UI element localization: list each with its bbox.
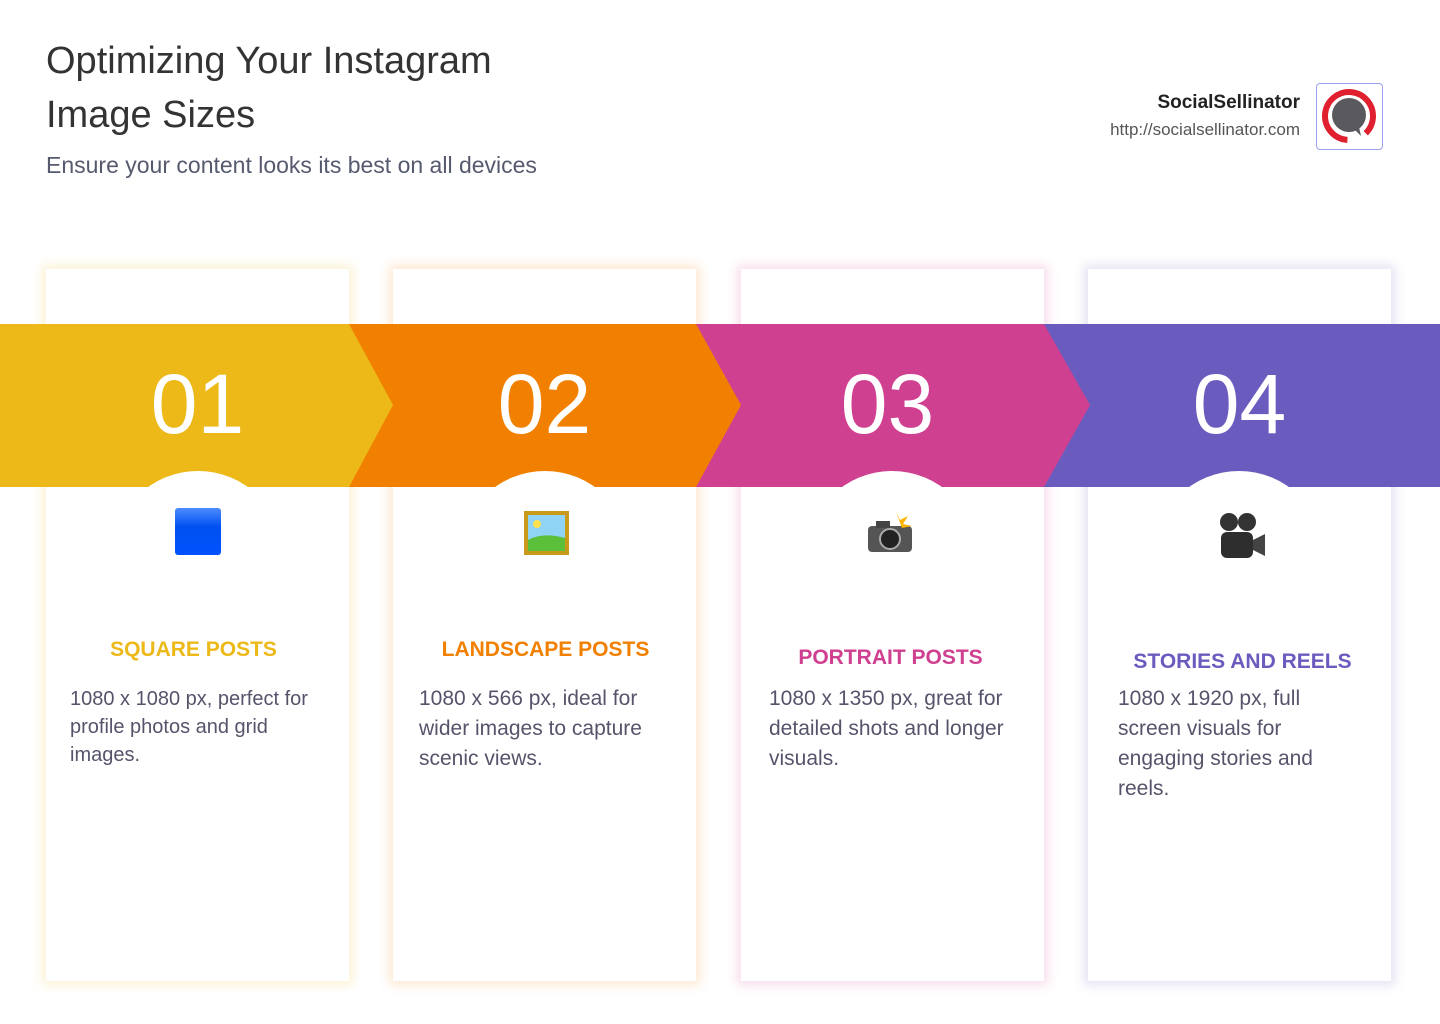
heading 4: STORIES AND REELS <box>1133 650 1352 673</box>
circles <box>112 471 284 643</box>
text: 03 <box>841 357 934 451</box>
subtitle: Ensure your content looks its best on all devices <box>46 152 537 178</box>
card 1 <box>46 269 349 981</box>
brand: SocialSellinator <box>1157 92 1300 113</box>
brand <box>1110 92 1300 139</box>
text 3: detailed shots and longer <box>769 717 1004 740</box>
title <box>46 40 492 136</box>
text 1: 1080 x 1080 px, perfect for <box>70 688 308 710</box>
heading 1: SQUARE POSTS <box>110 638 277 661</box>
arrow band <box>0 324 1440 487</box>
icon: framed picture <box>524 511 569 555</box>
text 3: visuals. <box>769 747 839 770</box>
heading 2: LANDSCAPE POSTS <box>442 638 649 661</box>
text 4: engaging stories and <box>1118 747 1313 770</box>
text 1: profile photos and grid <box>70 716 268 738</box>
title: Optimizing Your Instagram <box>46 40 492 82</box>
text 4: screen visuals for <box>1118 717 1281 740</box>
card 2 <box>393 269 696 981</box>
icon: movie camera <box>1220 513 1265 558</box>
text: 04 <box>1193 357 1286 451</box>
title: Image Sizes <box>46 94 255 136</box>
icon: blue square <box>175 508 221 555</box>
icon: camera with flash <box>868 512 912 552</box>
heading 3: PORTRAIT POSTS <box>798 646 983 669</box>
logo <box>1316 83 1383 150</box>
text 1: images. <box>70 744 140 766</box>
text 3 <box>769 687 1004 770</box>
text 2: wider images to capture <box>419 717 642 740</box>
brand: http://socialsellinator.com <box>1110 120 1300 139</box>
card 4 <box>1088 269 1391 981</box>
text 2 <box>419 687 642 770</box>
text 2: scenic views. <box>419 747 543 770</box>
card 3 <box>741 269 1044 981</box>
text 1 <box>70 688 308 766</box>
text: 02 <box>498 357 591 451</box>
text 4: 1080 x 1920 px, full <box>1118 687 1300 710</box>
text 4 <box>1118 687 1313 800</box>
numbers: 01 <box>151 357 244 451</box>
text 2: 1080 x 566 px, ideal for <box>419 687 637 710</box>
text 3: 1080 x 1350 px, great for <box>769 687 1002 710</box>
text 4: reels. <box>1118 777 1169 800</box>
